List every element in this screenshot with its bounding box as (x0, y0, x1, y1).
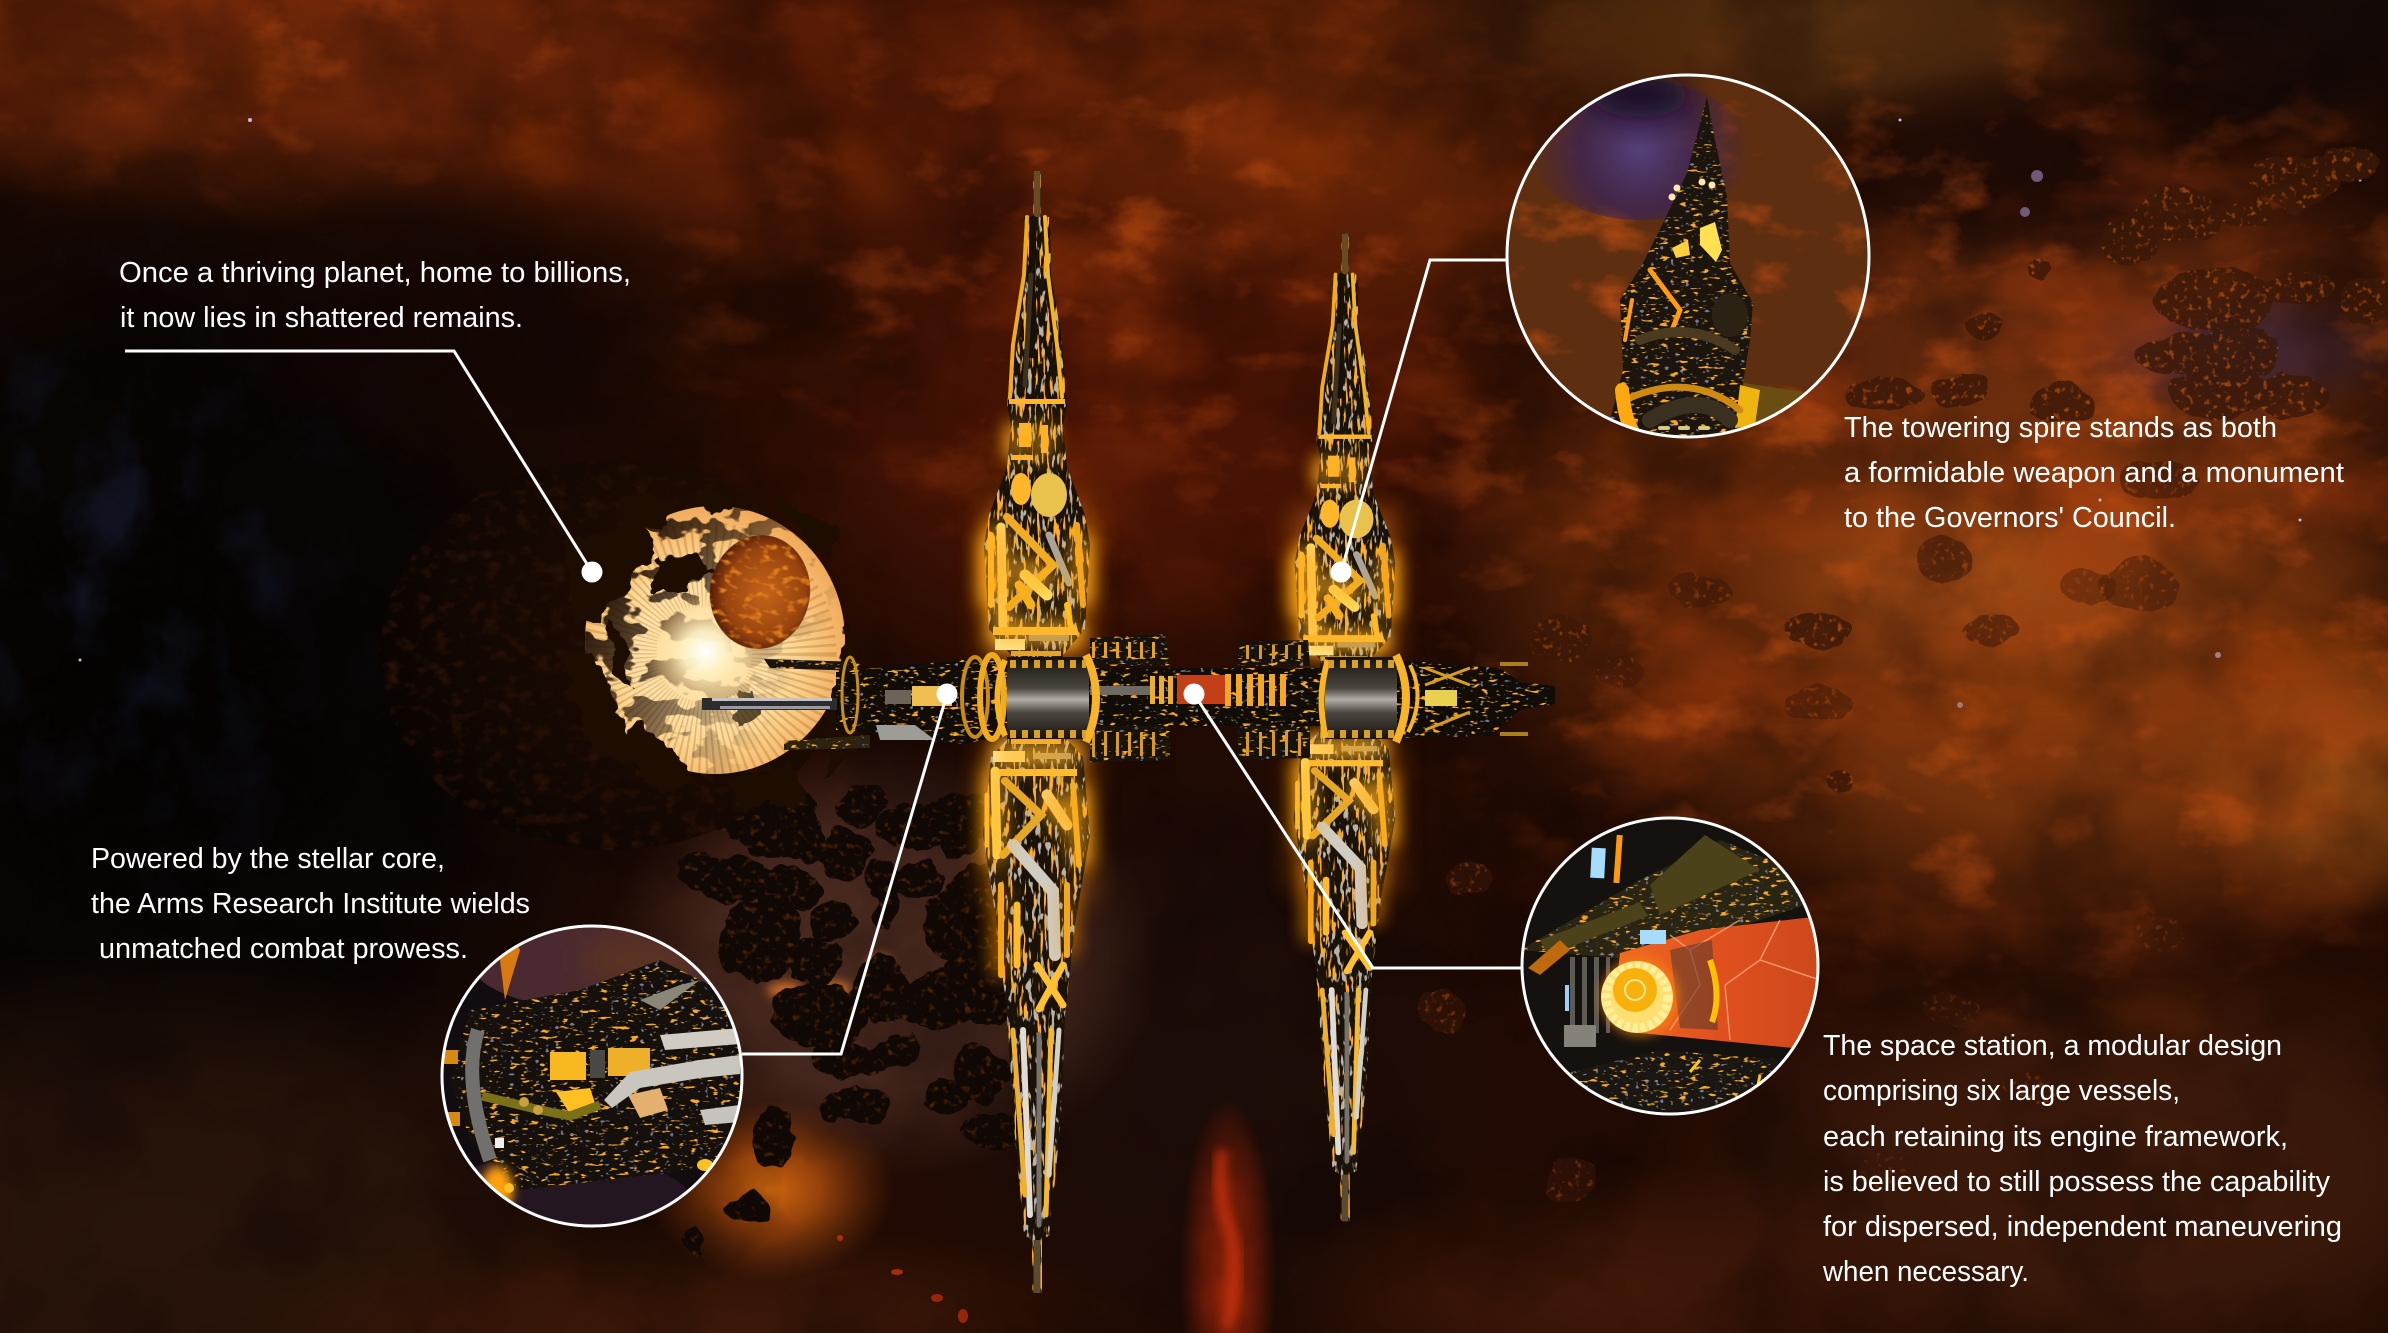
callout leader: research institute (742, 684, 958, 1054)
left needle (702, 698, 935, 740)
station structure (450, 960, 742, 1190)
crater shards (560, 490, 870, 810)
left tower (983, 171, 1090, 1293)
text: research institute caption: Powered by the stellar core, (91, 843, 445, 875)
yellow core windows (550, 1052, 586, 1080)
right tower (1294, 234, 1395, 1221)
spire body (1610, 98, 1753, 436)
left ring section (842, 655, 1004, 739)
space station (702, 171, 1555, 1293)
red reactor panel (1177, 675, 1225, 704)
text: research institute caption: unmatched combat prowess. (99, 933, 468, 965)
shattered planet (380, 460, 870, 850)
central spine (702, 634, 1555, 762)
text: research institute caption: the Arms Research Institute wields (91, 888, 530, 920)
molten core glow (643, 590, 767, 714)
text: planet caption: it now lies in shattered remains. (120, 302, 523, 334)
text: planet caption (119, 257, 631, 334)
right end section (1425, 662, 1528, 736)
text: modular station caption (1822, 1030, 2342, 1288)
callout leader: planet (125, 351, 602, 582)
orange gas behind lower asteroids (767, 922, 1012, 999)
silver pipe (604, 1055, 740, 1108)
text: spire caption: to the Governors' Council. (1844, 502, 2176, 534)
blue lights (1590, 848, 1606, 878)
upper and lower modules (1090, 634, 1310, 762)
asteroid field, right (1416, 147, 2388, 1204)
station glow (985, 500, 1395, 900)
callout leader: spire (1330, 260, 1506, 582)
hubs (1007, 657, 1089, 739)
text: modular station caption: The space station, a modular design (1823, 1030, 2282, 1062)
inset: reactor close-up (1520, 815, 1825, 1115)
text: planet caption: Once a thriving planet, home to billions, (119, 257, 631, 289)
red gas filaments (837, 1150, 1235, 1330)
text: modular station caption: comprising six large vessels, (1823, 1075, 2180, 1107)
text: spire caption: The towering spire stands as both (1844, 412, 2277, 444)
inset: research institute close-up (430, 910, 746, 1244)
text: research institute caption (91, 843, 530, 965)
text: modular station caption: is believed to still possess the capability (1823, 1166, 2330, 1198)
inset: spire close-up (1500, 70, 1880, 440)
planet shell (380, 460, 844, 850)
text: modular station caption: each retaining its engine framework, (1823, 1121, 2288, 1153)
molten rock (703, 529, 817, 655)
callout leader: reactor (1184, 684, 1523, 968)
text: modular station caption: for dispersed, independent maneuvering (1823, 1211, 2342, 1243)
text: spire caption: a formidable weapon and a monument (1844, 457, 2344, 489)
asteroid field, lower centre (678, 780, 1055, 1254)
crater interior (585, 506, 845, 774)
text: modular station caption: when necessary. (1822, 1256, 2029, 1288)
lower-left glow (481, 1166, 513, 1214)
text: spire caption (1844, 412, 2344, 534)
orange energy band (1612, 917, 1825, 1050)
glowing reactor core (1600, 957, 1680, 1037)
